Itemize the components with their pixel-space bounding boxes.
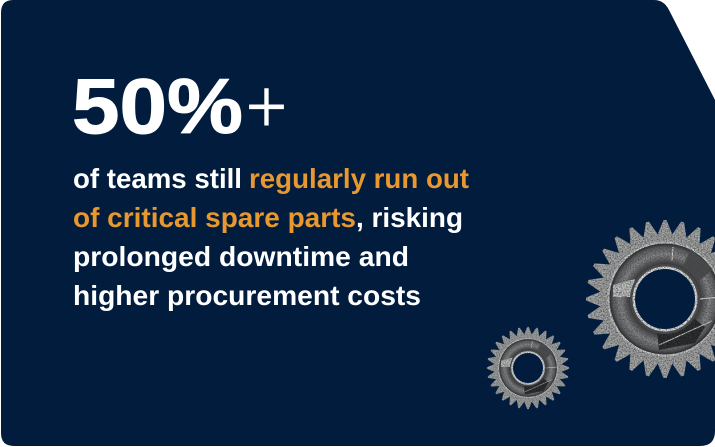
body text block: higher procurement costs [73,280,421,311]
icon: large gear [586,220,715,378]
body text block [73,163,469,311]
body text block: of teams still [73,163,242,194]
body text block: regularly run out [249,163,469,194]
icon: small gear [487,327,569,409]
headline statistic: 50% [72,62,243,150]
headline statistic: + [245,62,288,150]
body text block: , risking [356,202,463,233]
body text block: prolonged downtime and [73,241,409,272]
body text block: of critical spare parts [73,202,356,233]
